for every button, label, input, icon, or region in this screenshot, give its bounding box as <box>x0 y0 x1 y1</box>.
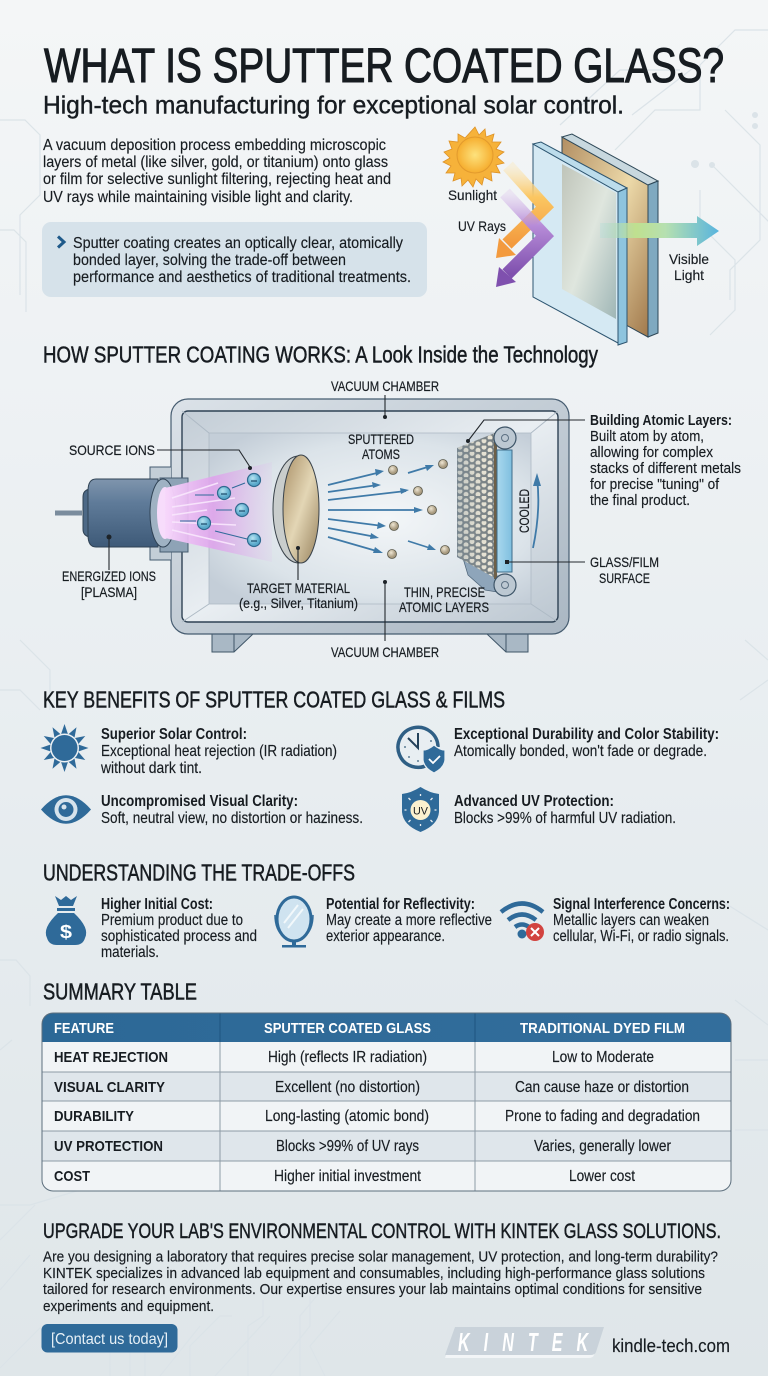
sputter arrows <box>328 465 436 553</box>
heading: how sputter coating works: HOW SPUTTER COATING WORKS: A Look Inside the Technology <box>43 342 598 368</box>
text block: building atomic layers: Building Atomic Layers: <box>590 412 732 429</box>
row: heat rejection: High (reflects IR radiation) <box>268 1049 427 1066</box>
benefit: durability: Atomically bonded, won't fade or degrade. <box>454 743 707 760</box>
cooled label and arrow <box>516 473 541 548</box>
label: thin precise atomic layers <box>399 584 489 615</box>
source ions <box>180 474 260 546</box>
benefit: signal: Metallic layers can weaken <box>553 912 709 929</box>
label: vacuum chamber top: VACUUM CHAMBER <box>331 378 439 394</box>
label: glass film surface: GLASS/FILM <box>590 554 659 570</box>
visible light label: Visible <box>669 251 709 267</box>
callout <box>42 222 427 297</box>
benefit: signal <box>553 896 730 945</box>
table header: TRADITIONAL DYED FILM <box>520 1020 685 1037</box>
row: durability: DURABILITY <box>54 1108 134 1125</box>
sputter chamber diagram <box>55 378 741 660</box>
label: glass film surface: SURFACE <box>599 570 650 586</box>
benefit: higher cost: Higher Initial Cost: <box>101 896 213 913</box>
call to action text: KINTEK specializes in advanced lab equipment and consumables, including high-performance glass solutions <box>43 1265 705 1282</box>
callout: Sputter coating creates an optically clear, atomically <box>73 235 403 252</box>
logo: KINTEK: KINTEK <box>458 1327 589 1357</box>
benefit: solar control <box>100 726 337 777</box>
call to action text: Are you designing a laboratory that requires precise solar management, UV protection, and long-term durability? <box>43 1248 718 1266</box>
label: source ions: SOURCE IONS <box>69 442 155 458</box>
benefit: reflectivity: May create a more reflective <box>326 912 492 929</box>
benefit: durability: Exceptional Durability and Color Stability: <box>454 726 719 743</box>
icon: sun <box>443 127 504 187</box>
call to action text: experiments and equipment. <box>43 1298 214 1315</box>
intro text block: layers of metal (like silver, gold, or titanium) onto glass <box>43 154 388 171</box>
chamber feet <box>212 634 528 652</box>
visible light label <box>669 251 709 283</box>
benefit: reflectivity: exterior appearance. <box>326 928 445 945</box>
panel: key benefits <box>40 724 719 832</box>
sunlight label: Sunlight <box>448 187 497 203</box>
benefit: UV protection: Advanced UV Protection: <box>454 793 614 810</box>
rear coated glass pane <box>562 134 658 337</box>
text block: building atomic layers: for precise "tuning" of <box>590 476 720 493</box>
visible light label: Light <box>674 267 704 283</box>
sputtered atoms <box>388 460 450 558</box>
row: durability: Long-lasting (atomic bond) <box>265 1108 429 1125</box>
UV rays label: UV Rays <box>458 218 506 234</box>
row: visual clarity: VISUAL CLARITY <box>54 1079 165 1096</box>
icon: sun <box>40 724 88 772</box>
table header: SPUTTER COATED GLASS <box>264 1020 431 1037</box>
benefit: durability <box>454 726 719 760</box>
row: durability <box>54 1108 700 1125</box>
row: visual clarity <box>54 1079 689 1096</box>
target disc <box>273 455 319 563</box>
row: UV protection: Blocks >99% of UV rays <box>276 1138 419 1155</box>
benefit: visual clarity: Soft, neutral view, no distortion or haziness. <box>101 810 363 827</box>
row: UV protection: UV PROTECTION <box>54 1138 163 1155</box>
icon: eye <box>41 795 91 824</box>
table header <box>54 1020 685 1037</box>
row: UV protection <box>54 1138 672 1155</box>
summary table <box>42 1013 731 1191</box>
contact button <box>42 1324 178 1352</box>
label: sputtered atoms: ATOMS <box>362 446 400 462</box>
call to action text: tailored for research environments. Our expertise ensures your lab maintains optimal conditions for sensitive <box>43 1281 702 1298</box>
plasma source <box>55 467 188 560</box>
icon: mirror <box>275 897 313 948</box>
substrate holder <box>457 427 516 596</box>
benefit: reflectivity <box>326 896 492 945</box>
icon: UV shield: UV <box>413 806 429 818</box>
benefit: UV protection: Blocks >99% of harmful UV radiation. <box>454 810 676 827</box>
row: cost: COST <box>54 1168 90 1185</box>
benefit: visual clarity: Uncompromised Visual Clarity: <box>101 793 298 810</box>
text block: building atomic layers: allowing for complex <box>590 444 713 461</box>
icon: UV shield <box>402 787 439 832</box>
intro text block: A vacuum deposition process embedding microscopic <box>43 137 386 154</box>
row: heat rejection: HEAT REJECTION <box>54 1049 168 1066</box>
row: heat rejection: Low to Moderate <box>552 1049 654 1066</box>
heading: trade-offs: UNDERSTANDING THE TRADE-OFFS <box>43 860 355 886</box>
text block: building atomic layers: stacks of different metals <box>590 460 741 477</box>
benefit: higher cost: sophisticated process and <box>101 928 257 945</box>
label: energized ions: [PLASMA] <box>81 584 137 600</box>
row: cost: Lower cost <box>569 1168 635 1185</box>
label: glass film surface <box>590 554 659 586</box>
contact button: [Contact us today] <box>51 1331 168 1348</box>
website: kindle-tech.com <box>612 1336 730 1356</box>
row: visual clarity: Excellent (no distortion) <box>275 1079 420 1096</box>
arrow: sunlight reflected <box>496 166 545 258</box>
text block: building atomic layers: the final product. <box>590 492 690 509</box>
intro text block <box>43 137 391 206</box>
table header: FEATURE <box>54 1020 114 1037</box>
label: sputtered atoms: SPUTTERED <box>348 431 414 447</box>
front glass pane <box>533 142 627 345</box>
row: cost: Higher initial investment <box>274 1168 421 1185</box>
benefit: higher cost: materials. <box>101 944 159 961</box>
row: UV protection: Varies, generally lower <box>534 1138 672 1155</box>
benefit: solar control: Superior Solar Control: <box>101 726 247 743</box>
intro text block: UV rays while maintaining visible light and clarity. <box>43 189 353 206</box>
heading: key benefits: KEY BENEFITS OF SPUTTER COATED GLASS & FILMS <box>43 686 505 712</box>
chamber body <box>171 399 569 634</box>
row: heat rejection <box>54 1049 654 1066</box>
label: target material <box>239 580 358 611</box>
benefit: reflectivity: Potential for Reflectivity: <box>326 896 475 913</box>
leaders <box>109 395 585 641</box>
row: durability: Prone to fading and degradation <box>505 1108 700 1125</box>
intro text block: or film for selective sunlight filtering, rejecting heat and <box>43 171 391 188</box>
benefit: solar control: Exceptional heat rejection (IR radiation) <box>101 743 337 760</box>
callout: bonded layer, solving the trade-off between <box>73 252 346 269</box>
benefit: UV protection <box>454 793 676 827</box>
label: sputtered atoms <box>348 431 414 462</box>
label: vacuum chamber bottom: VACUUM CHAMBER <box>331 644 439 660</box>
cooled label and arrow: COOLED <box>516 489 532 533</box>
plasma beam <box>165 462 272 562</box>
icon: clock with shield <box>398 727 445 773</box>
arrow: UV rays reflected <box>496 193 545 287</box>
benefit: higher cost <box>101 896 257 961</box>
text block: building atomic layers <box>590 412 741 509</box>
row: visual clarity: Can cause haze or distortion <box>515 1079 689 1096</box>
label: target material: TARGET MATERIAL <box>247 580 350 596</box>
benefit: solar control: without dark tint. <box>100 760 202 777</box>
heading: summary table: SUMMARY TABLE <box>43 978 197 1004</box>
panel: trade-offs <box>46 896 730 961</box>
benefit: signal: cellular, Wi-Fi, or radio signals. <box>553 928 729 945</box>
call to action text <box>43 1248 718 1315</box>
icon: money bag: $ <box>60 922 72 942</box>
row: cost <box>54 1168 635 1185</box>
label: thin precise atomic layers: ATOMIC LAYERS <box>399 599 489 615</box>
benefit: higher cost: Premium product due to <box>101 912 243 929</box>
label: energized ions: ENERGIZED IONS <box>62 568 156 584</box>
label: thin precise atomic layers: THIN, PRECISE <box>404 584 485 600</box>
label: target material: (e.g., Silver, Titanium) <box>239 595 358 611</box>
arrow: visible light <box>600 216 719 246</box>
text block: building atomic layers: Built atom by atom, <box>590 428 704 445</box>
icon: wifi with error badge <box>501 904 544 941</box>
callout: performance and aesthetics of traditional treatments. <box>73 269 411 286</box>
subtitle: High-tech manufacturing for exceptional solar control. <box>43 92 624 120</box>
icon: money bag <box>46 896 86 945</box>
label: energized ions <box>62 568 156 600</box>
benefit: visual clarity <box>101 793 363 827</box>
glass diagram <box>443 127 719 345</box>
